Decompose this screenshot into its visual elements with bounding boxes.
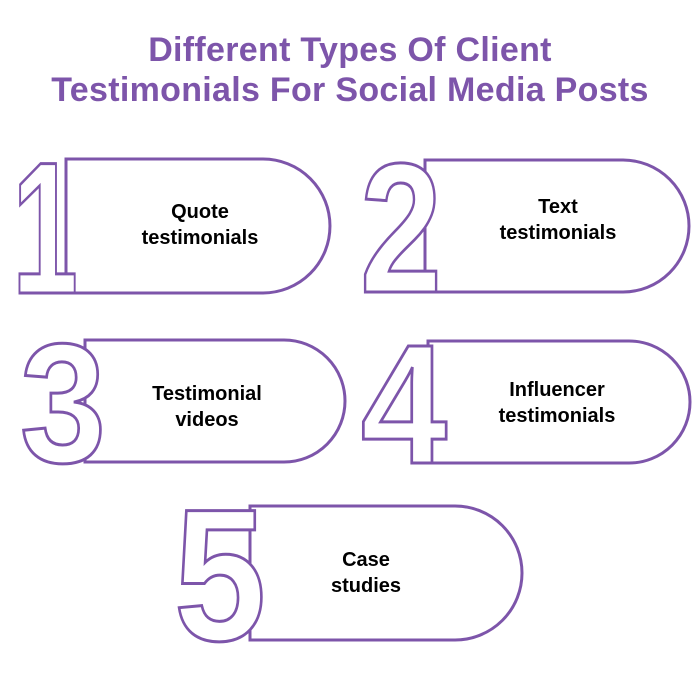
title xyxy=(51,31,649,109)
panel: 5 case studies: Case xyxy=(342,549,390,571)
panel: 2 text testimonials xyxy=(360,126,689,332)
title: Testimonials For Social Media Posts xyxy=(51,71,649,109)
panel: 4 influencer testimonials: Influencer xyxy=(509,379,605,401)
panel: 4 influencer testimonials: testimonials xyxy=(499,405,615,427)
title: Different Types Of Client xyxy=(148,31,552,69)
panel: 4 influencer testimonials: 4 xyxy=(361,310,447,500)
panel: 1 quote testimonials: 1 xyxy=(12,123,78,333)
panel: 1 quote testimonials: testimonials xyxy=(142,227,258,249)
panel: 2 text testimonials: testimonials xyxy=(500,222,616,244)
panel: 3 testimonial videos: Testimonial xyxy=(152,383,262,405)
panel: 4 influencer testimonials xyxy=(361,310,690,500)
panel: 3 testimonial videos: 3 xyxy=(20,309,106,499)
panel: 5 case studies: 5 xyxy=(174,470,266,680)
panel: 2 text testimonials: Text xyxy=(538,196,578,218)
panel: 5 case studies xyxy=(174,470,522,680)
panel: 5 case studies: studies xyxy=(331,575,401,597)
panel: 3 testimonial videos xyxy=(20,309,345,499)
panel: 1 quote testimonials xyxy=(12,123,330,333)
panel: 1 quote testimonials: Quote xyxy=(171,201,229,223)
panel: 3 testimonial videos: videos xyxy=(175,409,239,431)
panel: 2 text testimonials: 2 xyxy=(360,126,442,332)
